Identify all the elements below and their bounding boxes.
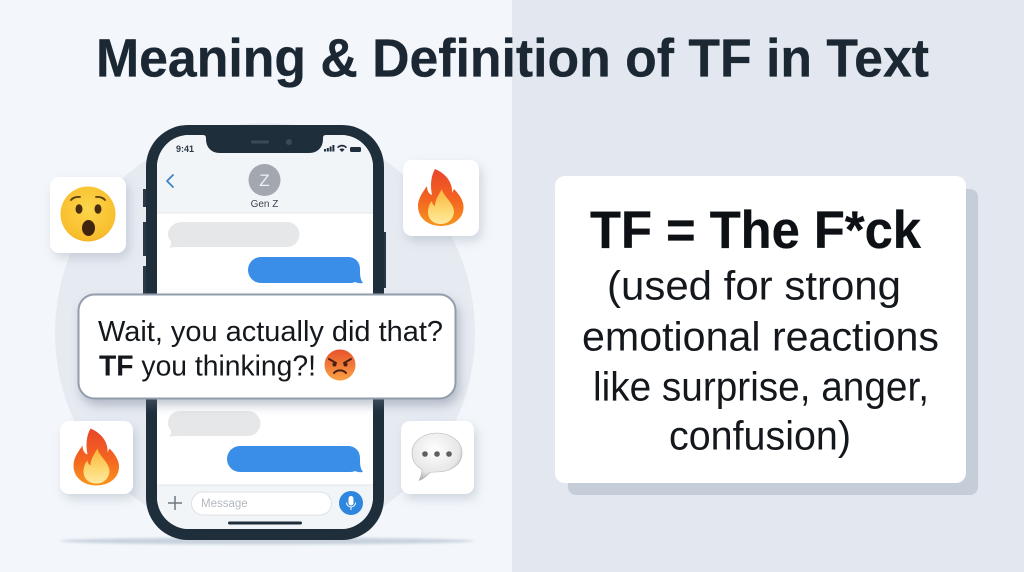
plus icon [168, 496, 182, 510]
message field: Message [201, 498, 248, 510]
panel: definition [555, 176, 978, 495]
definition text: emotional reactions [582, 314, 939, 360]
phone screen [157, 135, 373, 529]
panel shadow [568, 189, 978, 495]
phone body [146, 125, 384, 540]
icon: surprised face [60, 186, 116, 242]
grey bubble lower [168, 411, 260, 436]
avatar: Z [259, 171, 270, 190]
title: Meaning & Definition of TF in Text [96, 28, 929, 88]
definition text: like surprise, anger, [593, 364, 929, 410]
panel card [555, 176, 966, 483]
definition text: confusion) [669, 412, 851, 458]
back chevron [167, 175, 173, 187]
grey bubble upper [168, 222, 300, 248]
clock: 9:41 [176, 144, 194, 154]
icon: flame [418, 169, 464, 226]
phone side buttons [143, 189, 386, 296]
definition heading: TF = The F*ck [590, 201, 921, 260]
card: surprised emoji [50, 177, 126, 253]
speaker and camera [251, 139, 292, 145]
phone [143, 125, 386, 540]
icon: angry emoji [324, 350, 356, 380]
status icons [324, 145, 361, 152]
notch [203, 135, 326, 153]
card: flame top right [403, 160, 479, 236]
icon: flame [74, 428, 119, 486]
ground shadow [60, 538, 474, 544]
avatar [248, 164, 280, 196]
backdrop circle behind phone [55, 123, 475, 543]
definition text [582, 262, 939, 458]
contact name: Gen Z [251, 199, 278, 210]
home indicator [228, 522, 302, 524]
definition text: (used for strong [607, 262, 901, 308]
mic button [339, 491, 363, 515]
icon: speech bubble [412, 433, 462, 480]
blue bubble upper [248, 257, 363, 283]
card: speech bubble [401, 421, 474, 494]
blue bubble lower [227, 446, 363, 472]
input bar [157, 485, 373, 529]
callout line 2: TF you thinking?! [99, 350, 316, 382]
header bar [157, 135, 373, 213]
card: flame bottom left [60, 421, 133, 494]
background: right half [512, 0, 1024, 572]
message field [192, 492, 332, 515]
callout line 1: Wait, you actually did that? [98, 316, 443, 348]
callout message [78, 294, 456, 398]
background: left half [0, 0, 512, 572]
